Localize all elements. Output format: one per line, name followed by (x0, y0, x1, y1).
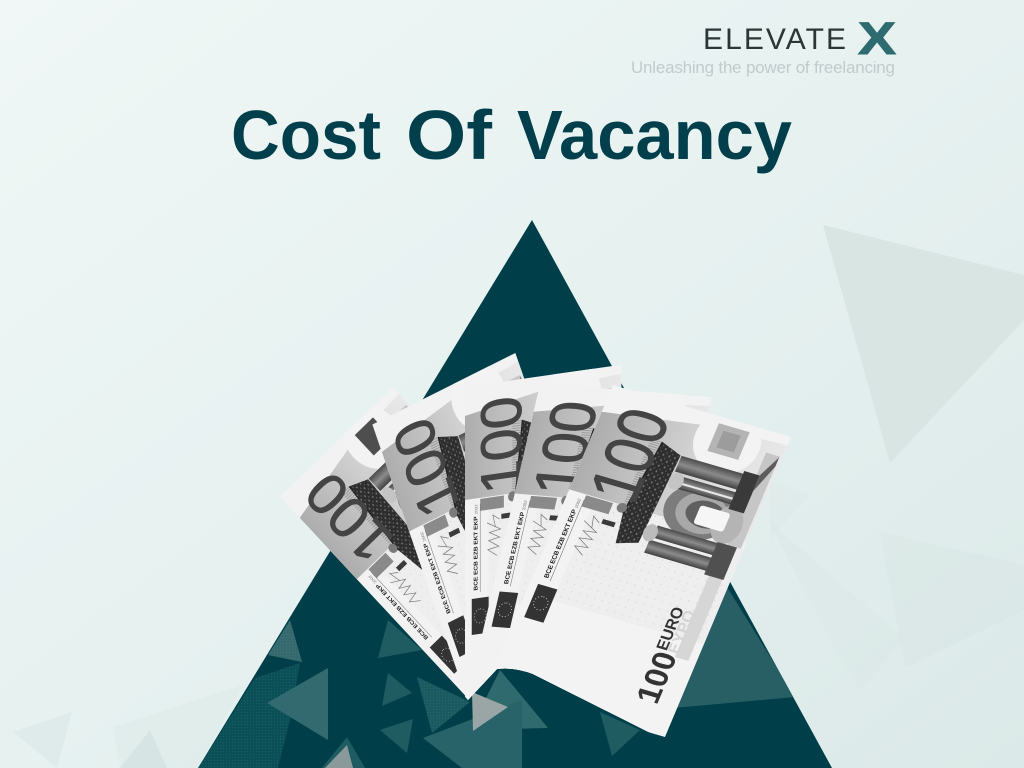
banknote 3: BCE ECB EZB EKT EKP (474, 516, 479, 591)
banknote 1 (280, 388, 552, 700)
banknote 2 (372, 353, 564, 700)
banknote 2: 100 (381, 407, 471, 528)
banknote 4: 100 (520, 398, 611, 498)
tagline: Unleashing the power of freelancing (631, 58, 895, 77)
title: Of (406, 96, 493, 174)
banknote 5 front (487, 376, 795, 737)
banknote 5 front: EURO (653, 605, 688, 653)
banknote 5 front: 100 (575, 400, 685, 510)
banknote 2: 2002 (419, 530, 427, 542)
banknote 2: BCE ECB EZB EKT EKP (423, 542, 452, 614)
banknote 5 front: 100 (629, 648, 684, 707)
banknote 4: BCE ECB EZB EKT EKP (503, 512, 526, 584)
dark triangle with facets (198, 220, 832, 768)
banknote 5 front: BCE ECB EZB EKT EKP (543, 508, 579, 579)
banknote 1: 100 (294, 460, 405, 575)
banknote 1: BCE ECB EZB EKT EKP (376, 582, 430, 640)
background faint triangles (13, 225, 1024, 768)
logo wordmark: ELEVATE (703, 23, 846, 56)
title: Vacancy (517, 96, 792, 174)
banknote 3 (465, 355, 621, 712)
fan of euro banknotes (273, 343, 795, 737)
banknote 3: 100 (470, 392, 533, 497)
triangle facets (198, 587, 795, 768)
title (231, 96, 792, 174)
banknote 4: 2002 (521, 500, 528, 510)
banknote 3: 2002 (474, 503, 479, 515)
title: Cost (231, 96, 381, 174)
banknote 4 (467, 374, 714, 714)
banknote 1: 2002 (367, 574, 377, 585)
logo (631, 13, 896, 77)
banknote 5 front: 2002 (574, 498, 582, 509)
banknote 5 front: EYPO (664, 608, 700, 656)
logo X mark: X (858, 13, 896, 64)
